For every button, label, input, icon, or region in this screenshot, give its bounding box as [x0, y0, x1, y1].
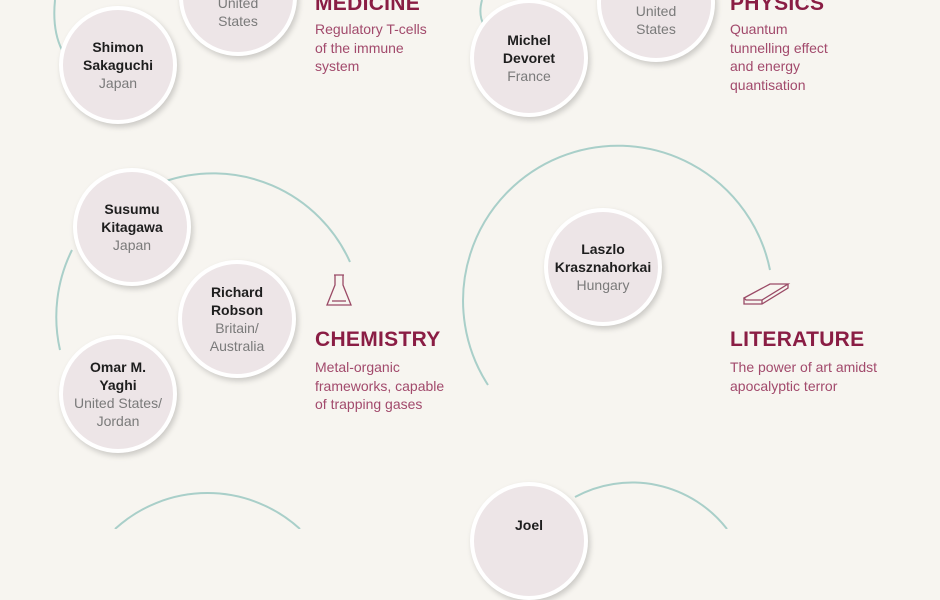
circle: Omar Yaghi: [59, 335, 177, 453]
circle: physics US: United: [636, 3, 676, 19]
text: physics desc: Quantum: [730, 21, 788, 37]
text: chemistry desc: frameworks, capable: [315, 378, 444, 394]
text: medicine desc: Regulatory T-cells: [315, 21, 427, 37]
circle: Shimon Sakaguchi: Shimon: [92, 39, 144, 55]
circle: Richard Robson: Richard: [211, 284, 263, 300]
text: physics desc: quantisation: [730, 76, 806, 92]
circle: Susumu Kitagawa: Susumu: [104, 201, 160, 217]
text: literature desc: The power of art amidst: [730, 359, 877, 375]
circle: Omar Yaghi: Omar M.: [90, 359, 146, 375]
circle: Omar Yaghi: Yaghi: [99, 377, 137, 393]
circle: Richard Robson: Britain/: [215, 320, 259, 336]
circle: Laszlo Krasznahorkai: Laszlo: [581, 241, 625, 257]
circle: Michel Devoret: Michel: [507, 32, 551, 48]
circle: Susumu Kitagawa: Japan: [113, 237, 151, 253]
circle: Joel: [470, 482, 588, 600]
circle: Michel Devoret: France: [507, 68, 551, 84]
circle: Omar Yaghi: United States/: [74, 395, 162, 411]
text: medicine desc: system: [315, 58, 359, 74]
circle: Joel: Joel: [515, 517, 543, 533]
text: physics desc: [730, 21, 828, 93]
circle: Laszlo Krasznahorkai: Krasznahorkai: [555, 259, 651, 275]
circle: Richard Robson: Australia: [210, 338, 264, 354]
heading: literature: LITERATURE: [730, 328, 864, 351]
circle: Michel Devoret: Devoret: [503, 50, 555, 66]
circle: Shimon Sakaguchi: Japan: [99, 75, 137, 91]
circle: Michel Devoret: [470, 0, 588, 117]
text: physics desc: and energy: [730, 58, 800, 74]
circle: Richard Robson: [178, 260, 296, 378]
text: chemistry desc: of trapping gases: [315, 396, 422, 412]
text: medicine desc: of the immune: [315, 40, 404, 56]
text: medicine desc: [315, 21, 427, 74]
circle: Omar Yaghi: Jordan: [97, 413, 139, 429]
circle: Shimon Sakaguchi: [59, 6, 177, 124]
circle: medicine US: States: [218, 13, 258, 29]
circle: physics US: States: [636, 21, 676, 37]
icon: book: [743, 283, 790, 305]
icon: flask: [326, 274, 352, 306]
text: chemistry desc: [315, 359, 444, 412]
circle: Laszlo Krasznahorkai: Hungary: [577, 277, 629, 293]
circle: Susumu Kitagawa: [73, 168, 191, 286]
heading: chemistry: CHEMISTRY: [315, 328, 441, 351]
circle: Susumu Kitagawa: Kitagawa: [101, 219, 163, 235]
circle: physics US: [597, 0, 715, 62]
text: chemistry desc: Metal-organic: [315, 359, 400, 375]
text: physics desc: tunnelling effect: [730, 40, 828, 56]
circle: Shimon Sakaguchi: Sakaguchi: [83, 57, 153, 73]
text: literature desc: [730, 359, 877, 394]
circle: Laszlo Krasznahorkai: [544, 208, 662, 326]
circle: Richard Robson: Robson: [211, 302, 263, 318]
circle: medicine US: [179, 0, 297, 56]
text: literature desc: apocalyptic terror: [730, 378, 837, 394]
